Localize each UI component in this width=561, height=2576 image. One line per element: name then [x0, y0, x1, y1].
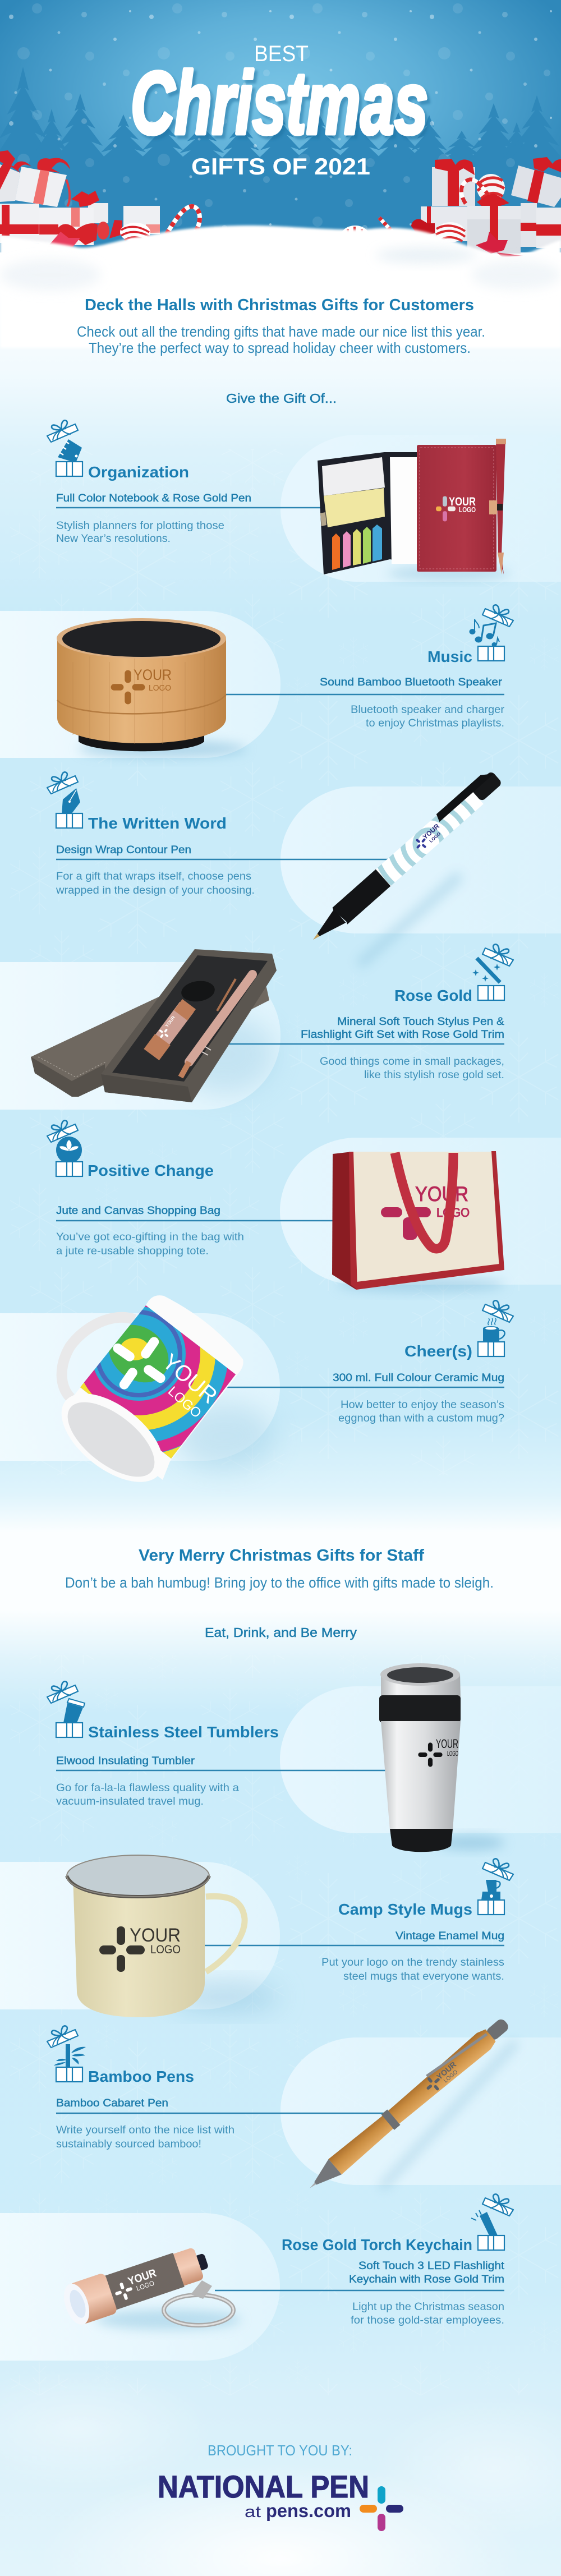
logo: YOUR: [130, 1925, 181, 1946]
intro text: customers: [77, 323, 485, 356]
description: a jute re-usable shopping tote.: [56, 1245, 209, 1257]
logo: YOUR: [415, 1183, 468, 1206]
intro text: staff: Don’t be a bah humbug! Bring joy to the office with gifts made to sleigh.: [65, 1574, 494, 1591]
panel: cheers: [0, 1295, 514, 1482]
description: [56, 870, 255, 896]
description: [338, 1399, 504, 1424]
panel: rose gold: [0, 944, 513, 1110]
icon: gift with mug: [478, 1300, 513, 1356]
product name: Mineral Soft Touch Stylus Pen &: [337, 1016, 504, 1028]
box lid: [31, 987, 269, 1097]
product name: [301, 1016, 504, 1041]
product name: Design Wrap Contour Pen: [56, 844, 191, 856]
icon: gift with nib: [47, 772, 82, 828]
product name: Bamboo Cabaret Pen: [56, 2097, 168, 2109]
description: You’ve got eco-gifting in the bag with: [56, 1231, 244, 1243]
title: [131, 42, 431, 180]
heading: Camp Style Mugs: [338, 1901, 472, 1918]
description: Light up the Christmas season: [352, 2301, 504, 2313]
icon: gift with torch: [471, 2194, 513, 2250]
logo: YOUR: [421, 822, 441, 841]
title line: christmas: Christmas: [131, 54, 428, 153]
product: enamel mug: [67, 1855, 245, 2017]
heading: Rose Gold: [394, 987, 472, 1004]
product name: Sound Bamboo Bluetooth Speaker: [320, 677, 503, 688]
description: For a gift that wraps itself, choose pens: [56, 870, 251, 882]
product: tie-dye mug: [56, 1295, 243, 1482]
product name: Elwood Insulating Tumbler: [56, 1755, 195, 1767]
description: [56, 519, 224, 545]
subheading: eat drink and be merry: Eat, Drink, and Be Merry: [205, 1625, 357, 1640]
product: bamboo speaker: [57, 618, 247, 758]
snow drift: [0, 226, 561, 348]
description: [320, 1055, 504, 1081]
icon: gift with camp mug: [478, 1859, 513, 1915]
logo: [111, 2267, 162, 2303]
panel: the written word: [46, 771, 561, 967]
heading: Rose Gold Torch Keychain: [282, 2236, 472, 2253]
heading: Cheer(s): [404, 1342, 472, 1360]
description: Bluetooth speaker and charger: [351, 703, 505, 716]
description: vacuum-insulated travel mug.: [56, 1795, 204, 1807]
box tray: [101, 949, 277, 1102]
title line: best: BEST: [254, 42, 309, 66]
product: bamboo pen: [303, 2014, 516, 2196]
description: [351, 703, 505, 729]
title line: christmas: Christmas: [134, 57, 431, 156]
description: for those gold-star employees.: [351, 2314, 504, 2326]
heading: Music: [427, 648, 472, 665]
logo: YOUR: [134, 666, 172, 683]
description: to enjoy Christmas playlists.: [366, 717, 504, 729]
logo: [96, 1320, 222, 1421]
logo: LOGO: [149, 683, 171, 693]
product: flashlight keychain: [59, 2241, 241, 2330]
logo: YOUR: [435, 2060, 458, 2081]
description: sustainably sourced bamboo!: [56, 2138, 201, 2150]
product name: Soft Touch 3 LED Flashlight: [358, 2260, 505, 2272]
footer credit: BROUGHT TO YOU BY:: [208, 2442, 352, 2459]
flashlight: YOUR: [164, 1015, 176, 1028]
logo: [411, 821, 445, 854]
product name: Vintage Enamel Mug: [396, 1930, 504, 1942]
product: wrap contour pen: [313, 772, 501, 967]
heading: Bamboo Pens: [88, 2068, 194, 2085]
icon: gift with tumbler: [47, 1681, 85, 1737]
heading: Positive Change: [88, 1162, 214, 1179]
logo: LOGO: [436, 1206, 470, 1220]
logo: national pen: NATIONAL PEN: [158, 2469, 369, 2504]
panel: positive change: [47, 1120, 561, 1292]
description: [56, 1231, 244, 1257]
heading: Stainless Steel Tumblers: [88, 1723, 279, 1741]
logo: national pen: [158, 2469, 403, 2531]
product: notebook: [318, 439, 511, 580]
logo: YOUR: [449, 495, 476, 508]
panel: bamboo pens: [47, 2014, 561, 2196]
heading: The Written Word: [88, 815, 227, 832]
logo: YOUR: [436, 1737, 458, 1751]
icon: gift with notebook: [47, 420, 82, 476]
product name: Jute and Canvas Shopping Bag: [56, 1205, 220, 1217]
icon: gift with pen: [472, 944, 513, 1000]
logo: LOGO: [429, 831, 442, 844]
product: tumbler: [379, 1663, 505, 1852]
product name: 300 ml. Full Colour Ceramic Mug: [333, 1372, 504, 1384]
forest silhouette: [0, 67, 561, 252]
description: wrapped in the design of your choosing.: [56, 884, 255, 896]
logo: national pen: pens.com: [266, 2500, 351, 2521]
description: New Year’s resolutions.: [56, 532, 171, 545]
logo: [111, 666, 172, 704]
gifts: right pile: [340, 157, 561, 257]
product name: Flashlight Gift Set with Rose Gold Trim: [301, 1029, 504, 1041]
panel: stainless steel tumblers: [47, 1663, 561, 1852]
product name: Full Color Notebook & Rose Gold Pen: [56, 493, 251, 504]
title line: gifts of 2021: GIFTS OF 2021: [191, 153, 370, 180]
description: [56, 2124, 234, 2150]
heading: staff section: Very Merry Christmas Gifts for Staff: [139, 1547, 424, 1565]
product: gift set box: [31, 949, 277, 1102]
panel: organization: [47, 420, 561, 582]
description: Write yourself onto the nice list with: [56, 2124, 234, 2136]
logo: [381, 1183, 470, 1240]
icon: gift with notes: [470, 605, 513, 661]
logo: LOGO: [135, 2279, 155, 2293]
description: Stylish planners for plotting those: [56, 519, 224, 532]
logo: LOGO: [443, 2069, 459, 2084]
icon: gift with leaves: [47, 1120, 82, 1176]
logo: LOGO: [447, 1749, 458, 1758]
logo: [436, 495, 476, 521]
product name: [349, 2260, 505, 2285]
description: steel mugs that everyone wants.: [343, 1970, 504, 1982]
title line: christmas: [131, 54, 431, 156]
description: [321, 1956, 504, 1982]
description: Go for fa-la-la flawless quality with a: [56, 1782, 239, 1794]
logo: YOUR: [158, 1349, 222, 1409]
logo: national pen: at: [245, 2503, 261, 2521]
pen: [181, 974, 252, 1077]
icon: gift with bamboo: [47, 2026, 86, 2082]
description: How better to enjoy the season’s: [341, 1399, 504, 1411]
heading: customers section: Deck the Halls with Christmas Gifts for Customers: [85, 296, 474, 314]
heading: Organization: [88, 463, 189, 481]
logo: [418, 1737, 458, 1767]
logo: [422, 2058, 462, 2096]
logo: LOGO: [150, 1943, 181, 1956]
description: Good things come in small packages,: [320, 1055, 504, 1068]
description: [351, 2301, 504, 2326]
product name: Keychain with Rose Gold Trim: [349, 2274, 504, 2285]
description: Put your logo on the trendy stainless: [321, 1956, 504, 1968]
logo: [99, 1925, 181, 1972]
intro text: customers: They’re the perfect way to spread holiday cheer with customers.: [89, 339, 471, 356]
logo: LOGO: [165, 1383, 204, 1421]
logo: LOGO: [459, 505, 476, 514]
product: tote bag: [332, 1151, 505, 1292]
intro text: customers: Check out all the trending gifts that have made our nice list this year.: [77, 323, 485, 340]
flashlight: [151, 1004, 189, 1055]
panel: camp style mugs: [0, 1855, 513, 2017]
header: winter scene: [0, 0, 561, 252]
logo: YOUR: [126, 2267, 158, 2288]
panel: rose gold torch keychain: [0, 2194, 513, 2361]
description: like this stylish rose gold set.: [364, 1069, 504, 1081]
description: [56, 1782, 239, 1807]
description: eggnog than with a custom mug?: [338, 1412, 504, 1424]
panel: music: [0, 605, 513, 758]
subheading: give the gift of: Give the Gift Of...: [226, 391, 337, 406]
gifts: left pile: [0, 150, 200, 248]
